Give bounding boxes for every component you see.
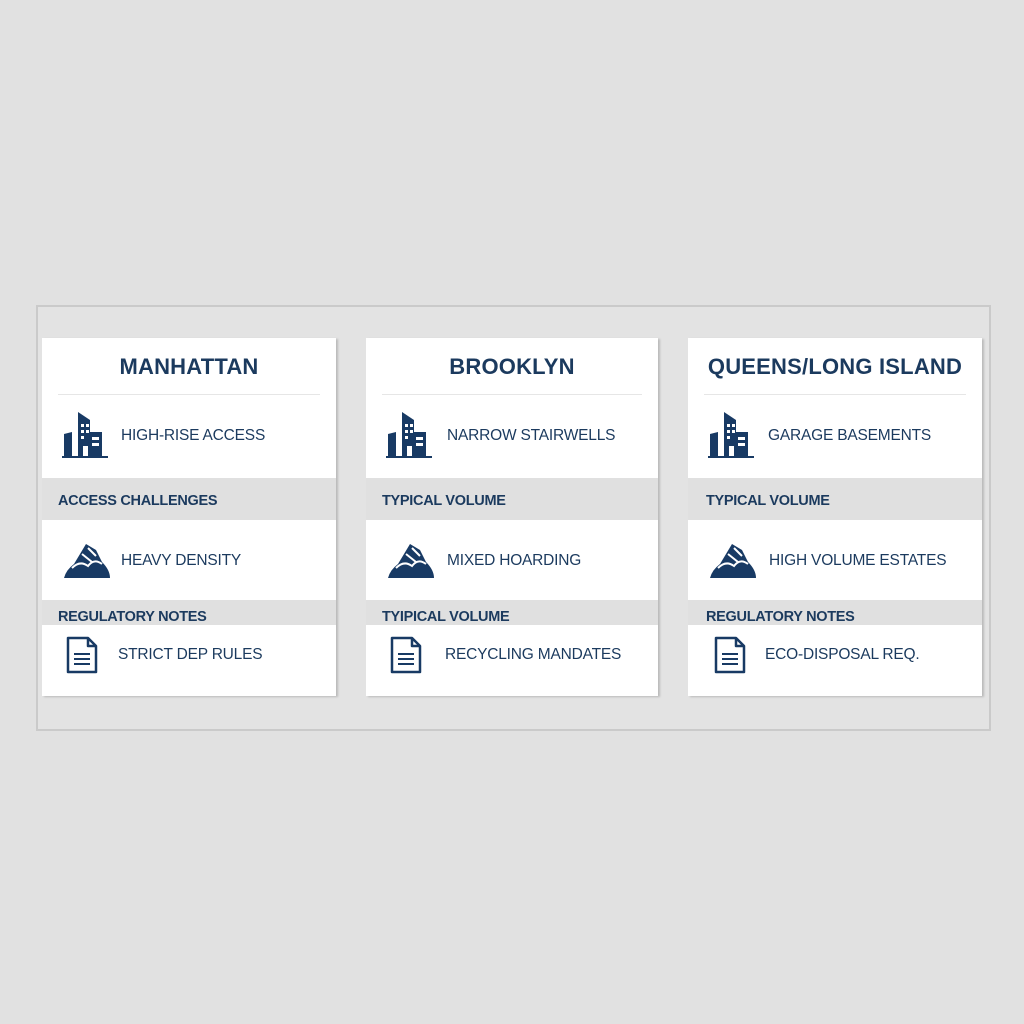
panel: brooklyn bbox=[366, 338, 658, 696]
row: high volume estates: HIGH VOLUME ESTATES bbox=[769, 552, 946, 569]
heading: QUEENS/LONG ISLAND bbox=[708, 354, 962, 379]
row: heavy density: HEAVY DENSITY bbox=[121, 552, 241, 569]
row: mixed hoarding bbox=[388, 544, 581, 578]
heading: MANHATTAN bbox=[119, 354, 259, 379]
band label: REGULATORY NOTES bbox=[706, 609, 855, 625]
row: heavy density bbox=[64, 544, 241, 578]
panel: manhattan bbox=[42, 338, 336, 696]
row: garage basements bbox=[708, 412, 931, 458]
band label: ACCESS CHALLENGES bbox=[58, 493, 217, 509]
band label: TYPICAL VOLUME bbox=[706, 493, 830, 509]
band label: TYIPICAL VOLUME bbox=[382, 609, 509, 625]
row: recycling mandates: RECYCLING MANDATES bbox=[445, 646, 621, 663]
row: narrow stairwells: NARROW STAIRWELLS bbox=[447, 427, 615, 444]
row: recycling mandates bbox=[390, 636, 621, 674]
row: high volume estates bbox=[710, 544, 946, 578]
row: mixed hoarding: MIXED HOARDING bbox=[447, 552, 581, 569]
row: narrow stairwells bbox=[386, 412, 615, 458]
band label: REGULATORY NOTES bbox=[58, 609, 207, 625]
band label: TYPICAL VOLUME bbox=[382, 493, 506, 509]
row: eco-disposal req: ECO-DISPOSAL REQ. bbox=[765, 646, 920, 663]
panel: queens/long island bbox=[688, 338, 982, 696]
heading: BROOKLYN bbox=[449, 354, 575, 379]
row: eco-disposal req bbox=[714, 636, 920, 674]
row: high-rise access bbox=[62, 412, 265, 458]
row: strict dep rules bbox=[66, 636, 262, 674]
outer frame bbox=[36, 305, 991, 731]
row: garage basements: GARAGE BASEMENTS bbox=[768, 427, 931, 444]
row: strict dep rules: STRICT DEP RULES bbox=[118, 646, 262, 663]
row: high-rise access: HIGH-RISE ACCESS bbox=[121, 427, 265, 444]
